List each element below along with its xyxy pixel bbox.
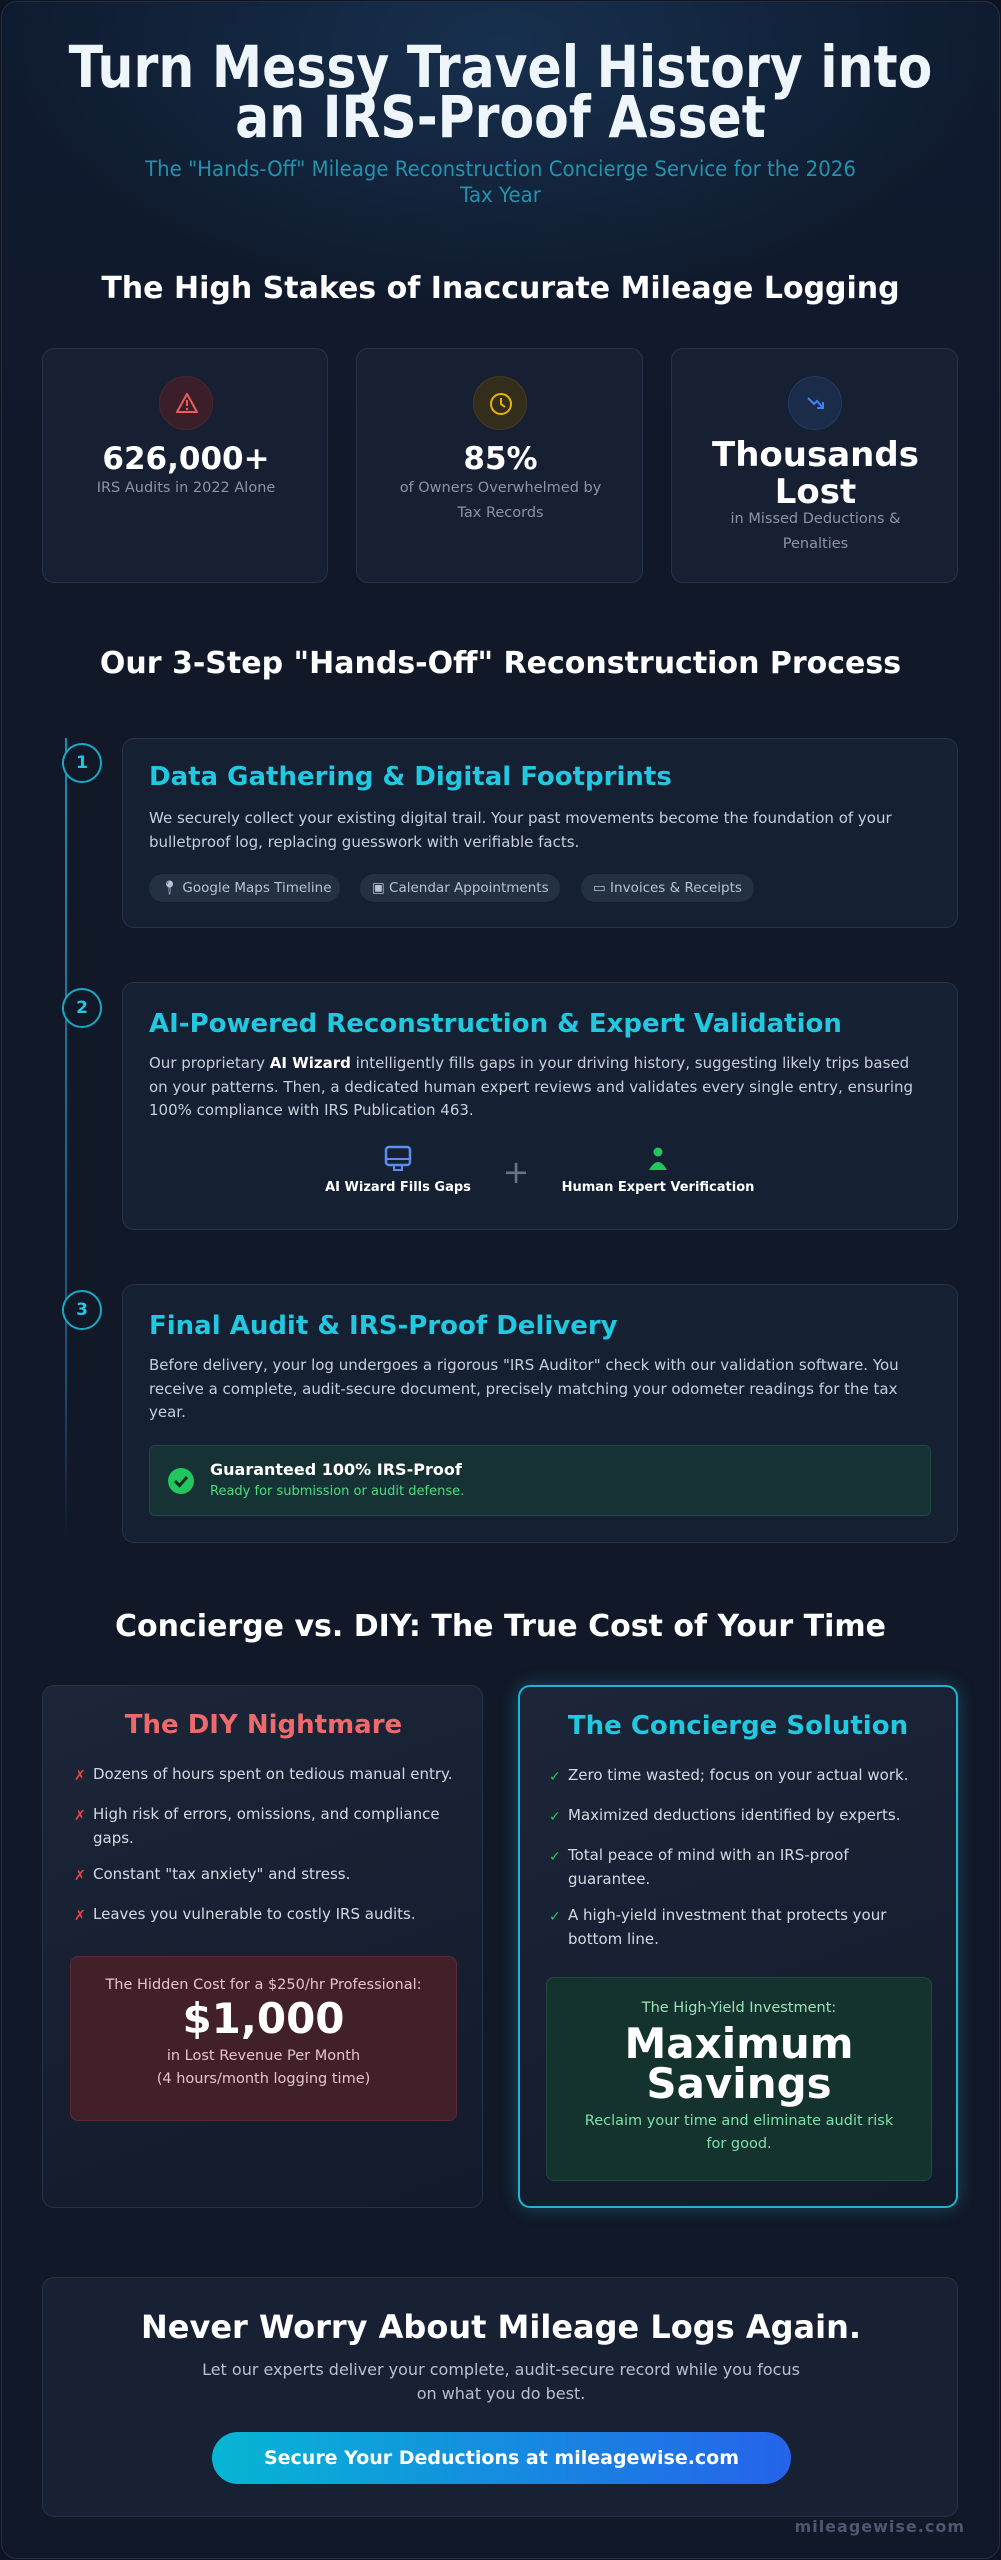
subtitle xyxy=(145,157,856,207)
step 3 text: Before delivery, your log undergoes a rigorous "IRS Auditor" check with our validation software. You receive a complete, audit-secure document, precisely matching your odometer readings for the tax year. xyxy=(149,1356,899,1421)
step 2 title: AI-Powered Reconstruction & Expert Validation xyxy=(149,1009,842,1039)
DIY list xyxy=(74,1765,453,1924)
CTA text xyxy=(202,2360,800,2403)
guarantee box: Guaranteed 100% IRS-Proof xyxy=(210,1460,462,1479)
stat card: thousands lost xyxy=(671,348,958,583)
stat card: overwhelmed: Tax Records xyxy=(457,505,544,521)
stat card: thousands lost: Thousands xyxy=(712,435,919,475)
stat card: audits: 626,000+ xyxy=(102,441,270,477)
step 1 card xyxy=(122,738,958,928)
step 2 card xyxy=(122,982,958,1230)
high-yield box: The High-Yield Investment: xyxy=(642,2000,836,2016)
step 2 number xyxy=(62,988,102,1028)
concierge list xyxy=(549,1766,908,1948)
step 1 title: Data Gathering & Digital Footprints xyxy=(149,762,672,792)
icon group: human expert xyxy=(562,1148,754,1195)
CTA button xyxy=(212,2432,791,2484)
icon: warning xyxy=(159,376,213,430)
icon group: AI wizard xyxy=(325,1146,471,1195)
panel: DIY: ✗ xyxy=(74,1808,86,1824)
stat card: thousands lost: Lost xyxy=(775,472,856,512)
icon: trend down xyxy=(788,376,842,430)
hidden cost box xyxy=(70,1956,457,2121)
stat card: overwhelmed: of Owners Overwhelmed by xyxy=(400,480,601,496)
plus sign: + xyxy=(503,1153,529,1191)
panel: DIY: ✗ xyxy=(74,1868,86,1884)
high-yield box: for good. xyxy=(706,2136,772,2152)
hidden cost box: in Lost Revenue Per Month xyxy=(167,2048,360,2064)
DIY list: Constant "tax anxiety" and stress. xyxy=(93,1865,350,1883)
icon group: human expert: Human Expert Verification xyxy=(562,1180,754,1195)
DIY title: The DIY Nightmare xyxy=(125,1710,402,1740)
title: Turn Messy Travel History into xyxy=(69,33,932,101)
icon: clock xyxy=(473,376,527,430)
concierge title: The Concierge Solution xyxy=(568,1711,908,1741)
panel: concierge: ✓ xyxy=(549,1909,561,1925)
CTA text: Let our experts deliver your complete, audit-secure record while you focus xyxy=(202,2360,800,2379)
hidden cost box: The Hidden Cost for a $250/hr Professional: xyxy=(105,1977,422,1993)
panel: concierge: ✓ xyxy=(549,1849,561,1865)
step 1 number: 1 xyxy=(76,753,88,773)
guarantee box xyxy=(149,1445,931,1516)
heading: concierge vs DIY: Concierge vs. DIY: The True Cost of Your Time xyxy=(115,1609,886,1644)
DIY list: Dozens of hours spent on tedious manual entry. xyxy=(93,1765,453,1783)
panel: concierge xyxy=(518,1685,958,2208)
step 3 number xyxy=(62,1290,102,1330)
tag: calendar: ▣ Calendar Appointments xyxy=(372,880,549,896)
panel: DIY xyxy=(42,1685,483,2208)
step 1 text: We securely collect your existing digital trail. Your past movements become the foundation of your bulletproof log, replacing guesswork with verifiable facts. xyxy=(149,809,892,850)
CTA heading: Never Worry About Mileage Logs Again. xyxy=(141,2308,861,2346)
stat card: overwhelmed xyxy=(356,348,643,583)
step 1 number xyxy=(62,743,102,783)
title: an IRS-Proof Asset xyxy=(235,83,766,151)
step 2 number: 2 xyxy=(76,998,88,1018)
DIY list: Leaves you vulnerable to costly IRS audits. xyxy=(93,1905,416,1923)
stat card: thousands lost: Penalties xyxy=(783,536,848,552)
high-yield box: Savings xyxy=(646,2059,832,2108)
stat card: audits xyxy=(42,348,328,583)
CTA text: on what you do best. xyxy=(417,2384,585,2403)
CTA panel xyxy=(42,2277,958,2517)
title xyxy=(68,33,932,151)
tag: invoices: ▭ Invoices & Receipts xyxy=(593,880,742,896)
subtitle: The "Hands-Off" Mileage Reconstruction Concierge Service for the 2026 xyxy=(145,157,856,181)
icon: check xyxy=(168,1468,194,1494)
tag: calendar xyxy=(360,874,560,902)
tag: invoices xyxy=(581,874,754,902)
stat card: audits: IRS Audits in 2022 Alone xyxy=(97,480,275,496)
stat card: thousands lost: in Missed Deductions & xyxy=(731,511,900,527)
DIY list: High risk of errors, omissions, and compliance gaps. xyxy=(93,1805,440,1847)
concierge list: Total peace of mind with an IRS-proof guarantee. xyxy=(568,1846,849,1888)
hidden cost box: (4 hours/month logging time) xyxy=(157,2071,370,2087)
icon group: AI wizard: AI Wizard Fills Gaps xyxy=(325,1180,471,1195)
concierge list: A high-yield investment that protects your bottom line. xyxy=(568,1906,886,1948)
step 3 card xyxy=(122,1284,958,1543)
timeline line xyxy=(65,738,67,1538)
guarantee box: Ready for submission or audit defense. xyxy=(210,1484,464,1499)
concierge list: Maximized deductions identified by experts. xyxy=(568,1806,901,1824)
step 3 title: Final Audit & IRS-Proof Delivery xyxy=(149,1311,618,1341)
hidden cost box: $1,000 xyxy=(182,1994,345,2043)
panel: concierge: ✓ xyxy=(549,1809,561,1825)
panel: DIY: ✗ xyxy=(74,1768,86,1784)
heading: high stakes: The High Stakes of Inaccurate Mileage Logging xyxy=(101,271,900,306)
panel: concierge: ✓ xyxy=(549,1769,561,1785)
footer watermark: mileagewise.com xyxy=(795,2517,965,2536)
step 3 number: 3 xyxy=(76,1300,88,1320)
stat card: overwhelmed: 85% xyxy=(463,441,538,477)
tag: google maps xyxy=(149,874,340,902)
high-yield box: Maximum xyxy=(624,2019,854,2068)
high-yield box: Reclaim your time and eliminate audit risk xyxy=(585,2113,893,2129)
tag: google maps: 📍︎ Google Maps Timeline xyxy=(161,880,332,896)
CTA button: Secure Your Deductions at mileagewise.com xyxy=(264,2447,739,2469)
high-yield box xyxy=(546,1977,932,2181)
subtitle: Tax Year xyxy=(460,183,541,207)
panel: DIY: ✗ xyxy=(74,1908,86,1924)
step 2 text: Our proprietary AI Wizard intelligently fills gaps in your driving history, suggesting likely trips based on your patterns. Then, a dedicated human expert reviews and validates every single entry, ensuring 100% compliance with IRS Publication 463. xyxy=(149,1054,913,1119)
heading: process: Our 3-Step "Hands-Off" Reconstruction Process xyxy=(100,646,901,681)
concierge list: Zero time wasted; focus on your actual work. xyxy=(568,1766,908,1784)
